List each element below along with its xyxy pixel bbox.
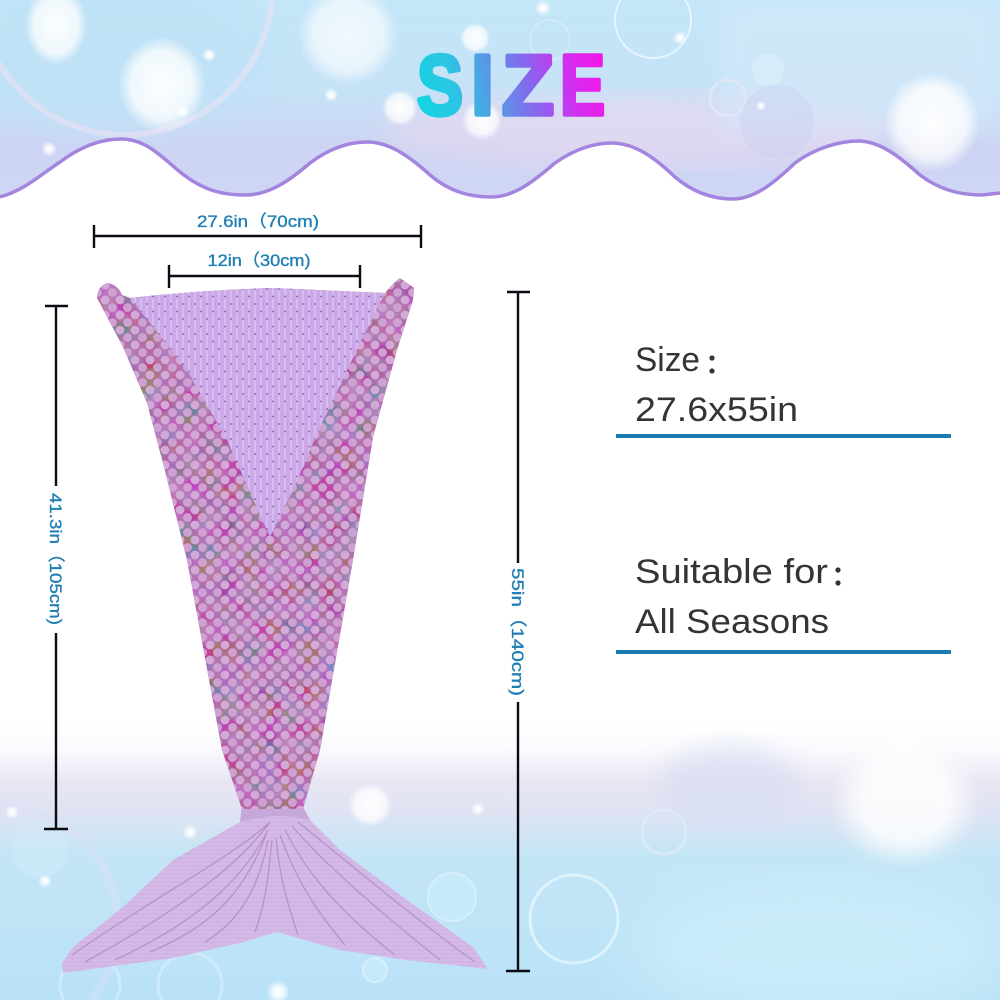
right height dimension: 55in (140cm) bbox=[506, 292, 530, 971]
spec: suitable for bbox=[616, 553, 951, 654]
blanket tail fin bbox=[62, 805, 488, 973]
left height dimension: 41.3in (105cm): 41.3in（105cm) bbox=[46, 493, 65, 625]
spec: suitable for: Suitable for bbox=[635, 553, 828, 591]
spec: size: 27.6x55in bbox=[635, 391, 798, 429]
blanket body scales bbox=[90, 275, 420, 810]
spec: size bbox=[616, 341, 951, 438]
top width dimension: 27.6in (70cm): 27.6in（70cm) bbox=[197, 212, 319, 231]
opening width dimension: 12in (30cm) bbox=[169, 251, 360, 288]
title: E bbox=[560, 38, 605, 134]
background: top banner bbox=[0, 0, 1000, 205]
title: I bbox=[471, 38, 494, 134]
opening width dimension: 12in (30cm): 12in（30cm) bbox=[208, 251, 310, 270]
spec: size: Size bbox=[635, 341, 700, 379]
title: S bbox=[417, 38, 463, 134]
white page area bbox=[0, 139, 1000, 721]
top width dimension: 27.6in (70cm) bbox=[94, 212, 421, 248]
blanket inner pocket bbox=[130, 288, 385, 537]
title: Z bbox=[502, 38, 554, 134]
title bbox=[417, 38, 605, 134]
spec: suitable for: All Seasons bbox=[635, 603, 829, 641]
mermaid blanket bbox=[62, 275, 488, 973]
wave divider bbox=[0, 139, 1000, 199]
right height dimension: 55in (140cm): 55in（140cm) bbox=[508, 568, 527, 696]
background: bottom bubbles bbox=[0, 720, 1000, 1000]
left height dimension: 41.3in (105cm) bbox=[44, 306, 68, 829]
